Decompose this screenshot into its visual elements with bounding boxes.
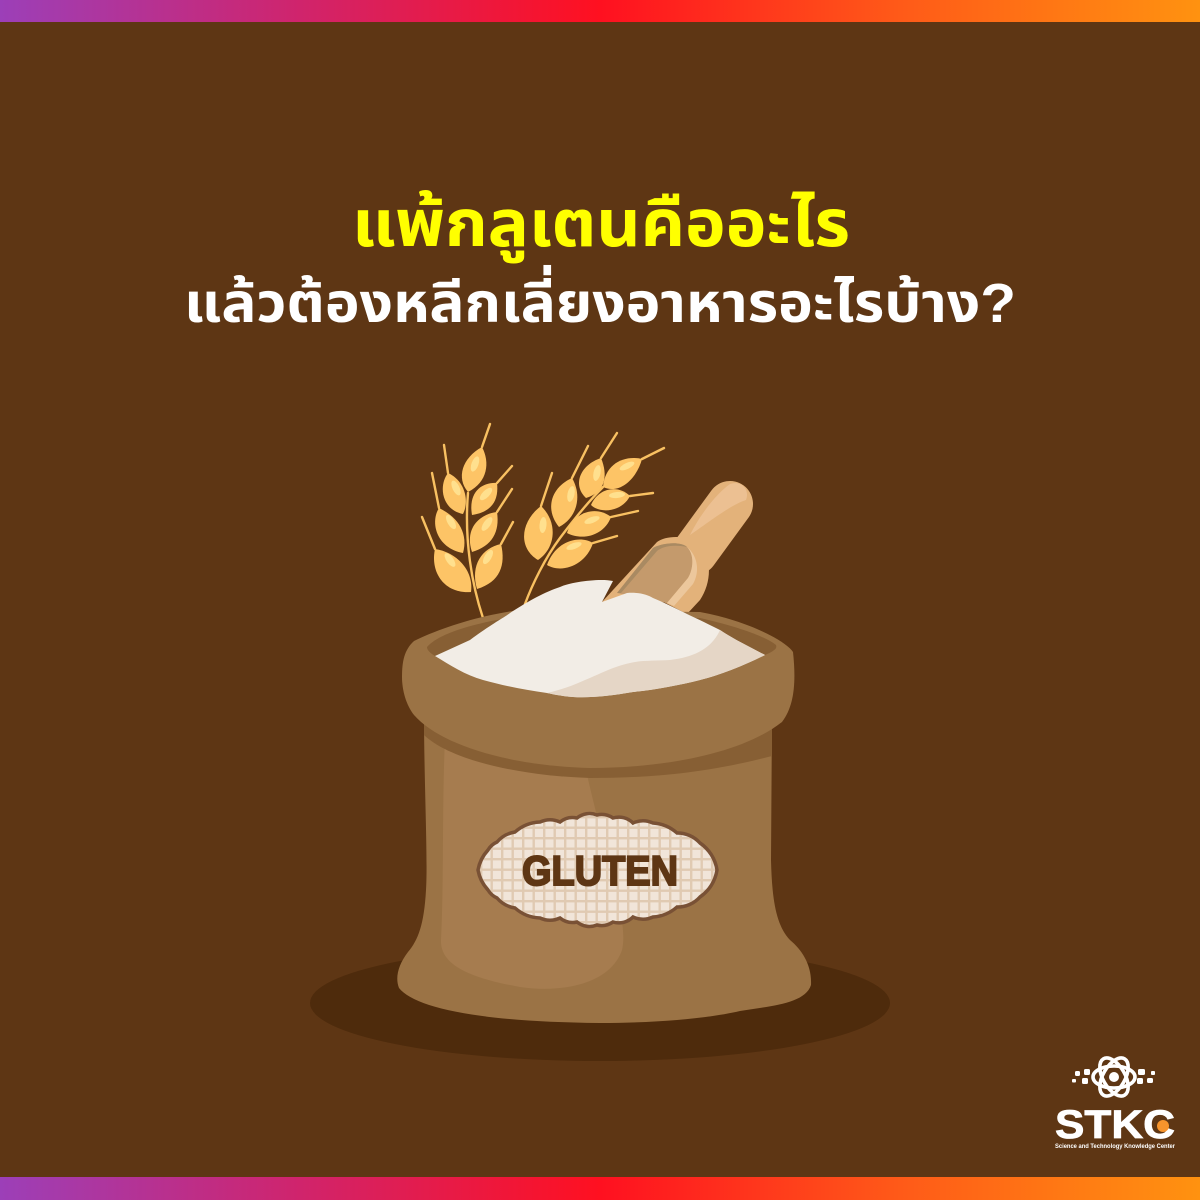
- label badge: [478, 814, 717, 926]
- logo wordmark: STKC: [1055, 1103, 1175, 1147]
- title line 1: แพ้กลูเตนคืออะไร: [352, 186, 850, 263]
- title: [184, 186, 1016, 334]
- label: GLUTEN: [478, 814, 717, 926]
- title line 2: แล้วต้องหลีกเลี่ยงอาหารอะไรบ้าง?: [184, 264, 1016, 334]
- label text: GLUTEN: [522, 847, 678, 894]
- icon: right wheat ear: [524, 433, 664, 604]
- flour shadow: [547, 630, 765, 697]
- icon: wooden scoop: [602, 483, 747, 614]
- sack body: [397, 715, 811, 1023]
- sack light fold: [441, 740, 623, 989]
- flour pile: [435, 580, 765, 697]
- top gradient bar: [0, 0, 1200, 22]
- logo: STKC: [1055, 1053, 1176, 1150]
- sack rim: [402, 610, 794, 768]
- icon: sack: [397, 610, 811, 1023]
- shadow under rim: [424, 715, 772, 778]
- icon: orange dot: [1157, 1120, 1169, 1132]
- bottom gradient bar: [0, 1177, 1200, 1200]
- icon: atom emblem: [1072, 1053, 1155, 1101]
- icon: left wheat ear: [422, 424, 513, 618]
- ground shadow: [310, 945, 890, 1061]
- logo tagline: Science and Technology Knowledge Center: [1055, 1144, 1176, 1150]
- sack opening: [427, 616, 776, 656]
